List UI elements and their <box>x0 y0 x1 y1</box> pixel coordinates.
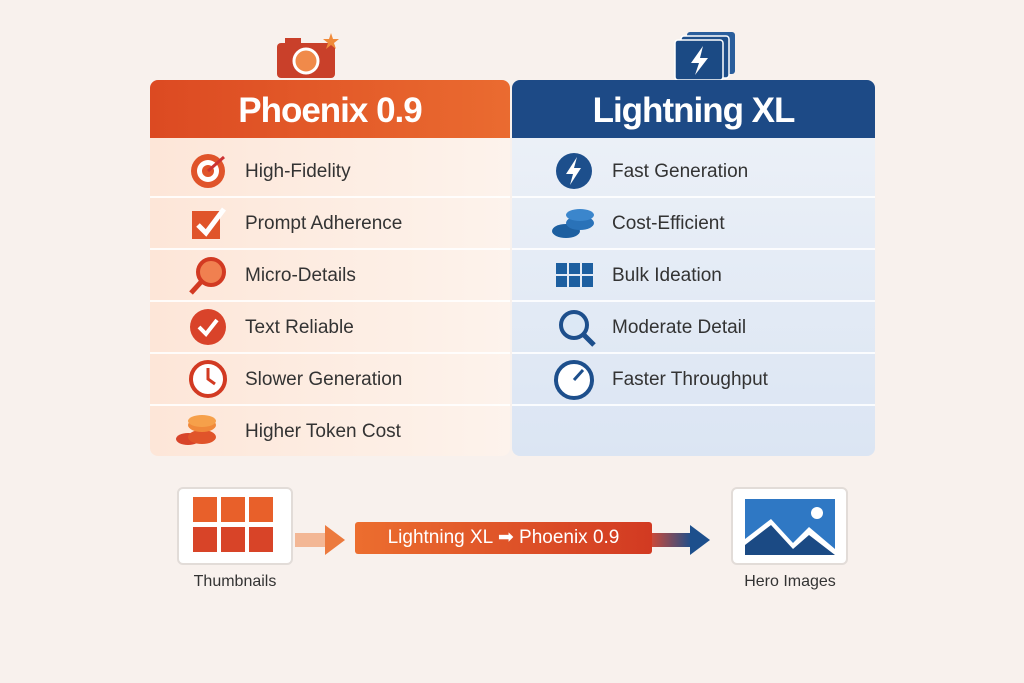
row: Higher Token Cost <box>176 415 401 445</box>
row: Cost-Efficient: Cost-Efficient <box>612 213 725 234</box>
row: Fast Generation: Fast Generation <box>612 161 748 182</box>
row: Micro-Details: Micro-Details <box>245 265 356 286</box>
arrow: right <box>652 525 710 555</box>
heading: Lightning XL <box>512 80 875 138</box>
row: Prompt Adherence <box>150 197 510 250</box>
row: Fast Generation <box>512 145 875 198</box>
box: thumbnails <box>177 487 293 565</box>
row: Moderate Detail: Moderate Detail <box>612 317 746 338</box>
box: hero image <box>731 487 848 565</box>
row: Text Reliable: Text Reliable <box>245 317 354 338</box>
icon: lightning cards <box>674 32 735 80</box>
row: Slower Generation <box>150 353 510 406</box>
row: Faster Throughput <box>512 353 875 406</box>
row: Micro-Details <box>150 249 510 302</box>
pill: workflow <box>355 522 652 554</box>
panel: Lightning XL <box>512 80 875 456</box>
row: High-Fidelity: High-Fidelity <box>245 161 351 182</box>
row: Bulk Ideation <box>512 249 875 302</box>
row: Cost-Efficient <box>512 197 875 250</box>
row: Text Reliable <box>150 301 510 354</box>
panel: Phoenix 0.9 <box>150 80 510 456</box>
arrow: left <box>295 525 345 555</box>
label: Hero Images: Hero Images <box>744 573 836 590</box>
row: Faster Throughput: Faster Throughput <box>612 369 768 390</box>
pill: workflow: Lightning XL ➡ Phoenix 0.9 <box>388 527 619 548</box>
row: Slower Generation: Slower Generation <box>245 369 402 390</box>
icon: camera <box>277 33 339 78</box>
row: Moderate Detail <box>512 301 875 354</box>
row: High-Fidelity <box>150 145 510 198</box>
heading: Phoenix 0.9 <box>150 80 510 138</box>
row: Bulk Ideation: Bulk Ideation <box>612 265 722 286</box>
row: Higher Token Cost: Higher Token Cost <box>245 421 401 442</box>
row: Prompt Adherence: Prompt Adherence <box>245 213 402 234</box>
label: Thumbnails: Thumbnails <box>194 573 276 590</box>
heading: Lightning XL: Lightning XL <box>593 91 794 130</box>
heading: Phoenix 0.9: Phoenix 0.9 <box>238 91 422 130</box>
